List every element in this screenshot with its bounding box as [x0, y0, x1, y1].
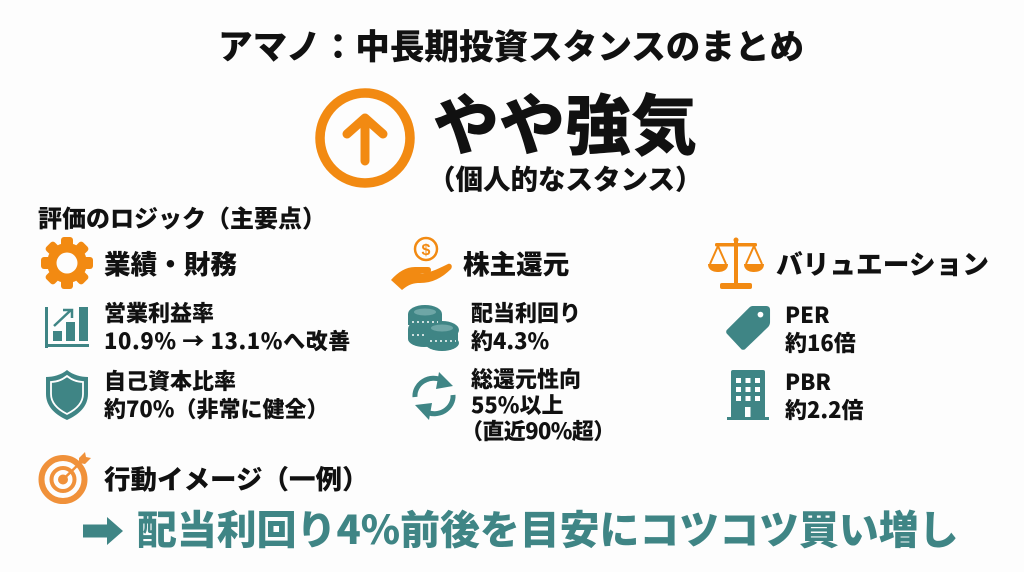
metric: operating margin: 営業利益率 [104, 296, 214, 328]
icon: hand holding coin: $ [422, 242, 431, 259]
metric: PBR: 約2.2倍 [785, 392, 864, 424]
metric: operating margin: 10.9% → 13.1%へ改善 [104, 324, 351, 356]
panel: shareholder returns [391, 236, 615, 446]
heading: action image: 行動イメージ（一例） [104, 458, 368, 497]
metric: dividend yield: 約4.3% [471, 324, 549, 356]
stance note: （個人的なスタンス） [428, 157, 702, 197]
icon: rising bar chart [45, 307, 89, 348]
icon: office building [727, 370, 769, 420]
metric: total payout ratio: 総還元性向 [471, 362, 581, 394]
icon: price tag [726, 306, 770, 350]
metric: PER [785, 298, 856, 358]
metric: total payout ratio: （直近90%超） [461, 414, 615, 446]
icon: hand holding coin [391, 236, 452, 290]
metric: equity ratio: 自己資本比率 [104, 364, 236, 396]
icon: coins [408, 305, 459, 351]
icon: scales [708, 238, 764, 289]
metric: dividend yield: 配当利回り [471, 296, 581, 328]
metric: equity ratio: 約70%（非常に健全） [104, 392, 328, 424]
icon: refresh arrows [412, 372, 456, 420]
heading: shareholder returns: 株主還元 [463, 243, 569, 282]
metric: equity ratio [104, 364, 328, 424]
metric: PER: PER [785, 298, 830, 330]
section heading: logic: 評価のロジック（主要点） [38, 199, 326, 234]
action statement: 配当利回り4%前後を目安にコツコツ買い増し [137, 498, 959, 556]
panel: valuation [708, 238, 989, 424]
stance headline: やや強気 [433, 73, 697, 169]
metric: operating margin [104, 296, 351, 356]
metric: PBR: PBR [785, 365, 831, 397]
icon: gear [41, 237, 93, 289]
icon: target [38, 452, 91, 504]
arrow: action [83, 517, 123, 545]
heading: performance and finance: 業績・財務 [104, 243, 237, 282]
heading: valuation: バリュエーション [776, 243, 989, 282]
icon: up arrow in circle [315, 88, 415, 188]
metric: PER: 約16倍 [785, 326, 856, 358]
title: アマノ：中長期投資スタンスのまとめ [218, 19, 804, 69]
panel: performance and finance [41, 237, 351, 424]
metric: dividend yield [471, 296, 581, 356]
icon: shield [46, 370, 88, 420]
metric: total payout ratio [461, 362, 615, 446]
metric: PBR [785, 365, 864, 424]
metric: total payout ratio: 55%以上 [471, 388, 564, 420]
